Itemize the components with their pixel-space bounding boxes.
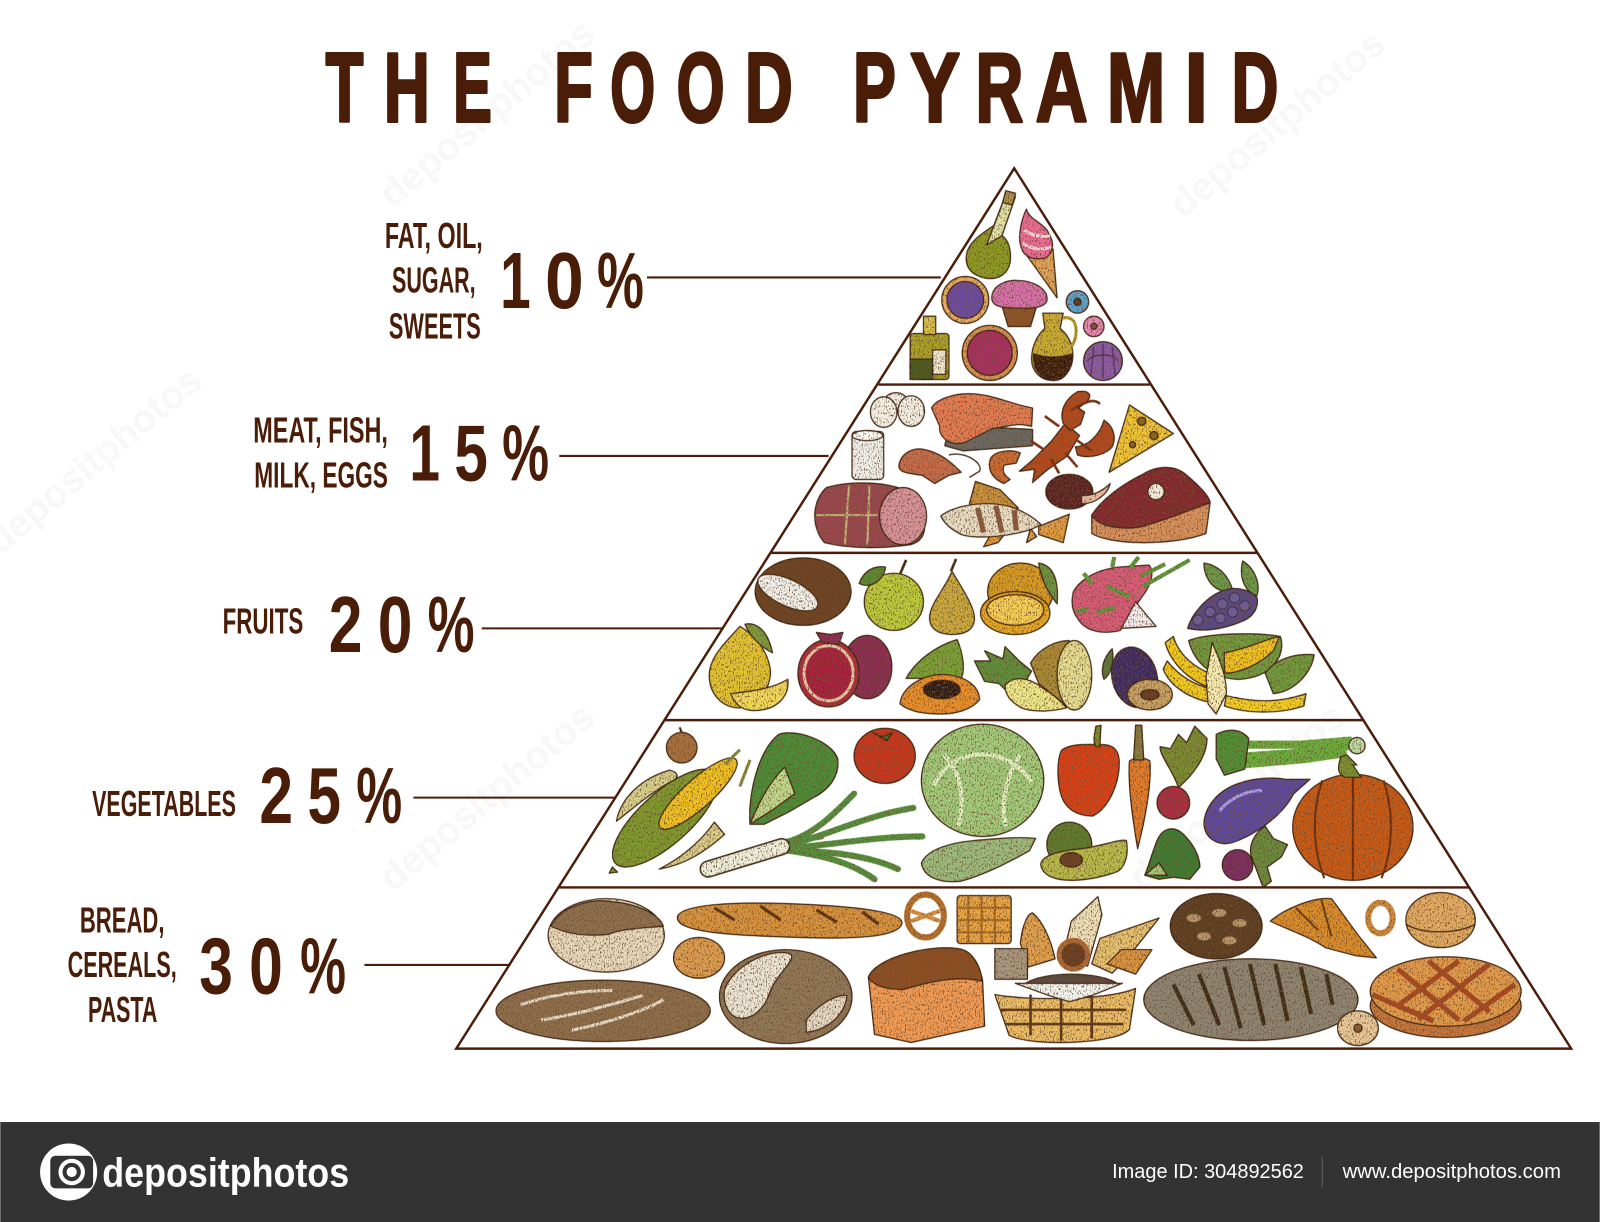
label: bread cereals pasta (68, 900, 177, 1030)
title: R (975, 32, 1023, 142)
label: meat fish milk eggs: MEAT, FISH, (253, 411, 388, 451)
icon: burger bun (1406, 893, 1475, 948)
label: fat oil sugar sweets: SWEETS (389, 307, 481, 347)
icon: papaya (900, 640, 980, 714)
icon: pear (930, 559, 974, 634)
brand name: depositphotos (102, 1149, 349, 1195)
label: meat fish milk eggs (253, 411, 388, 496)
icon: small prawn (989, 451, 1020, 483)
icon: eggs (870, 393, 924, 427)
image id: Image ID: 304892562 (1112, 1161, 1304, 1183)
leader line: 15 (559, 455, 829, 457)
icon: round bread (548, 899, 664, 972)
icon: bread basket (995, 897, 1159, 1043)
icon: tomato (854, 728, 915, 783)
title: Y (910, 32, 960, 142)
icon: lattice pie (1370, 957, 1521, 1037)
icon: onion (666, 727, 697, 763)
icon: dragon fruit (1072, 557, 1190, 632)
icon: eggplant (1204, 778, 1310, 844)
icon: seeded pastry pile (1170, 894, 1262, 959)
title: D (745, 32, 793, 142)
tier: fat oil sugar sweets (385, 216, 941, 347)
icon: leek (708, 794, 922, 879)
title (326, 32, 1278, 142)
icon: berry tart (962, 325, 1017, 380)
icon: pretzel (907, 895, 944, 937)
percentage: 25 (259, 751, 402, 840)
title: E (453, 32, 492, 142)
icon: salmon steak (932, 394, 1033, 451)
icon: beetroot (1222, 826, 1288, 887)
foods: vegetables (598, 724, 1413, 887)
percentage: 20: % (428, 580, 475, 669)
label: meat fish milk eggs: MILK, EGGS (254, 456, 388, 496)
percentage: 30: 3 (199, 922, 233, 1011)
icon: bell pepper (1058, 725, 1119, 816)
tier: vegetables (92, 751, 615, 840)
icon: long rye bread (496, 980, 710, 1041)
icon: coconut (753, 558, 851, 625)
icon: croissant (1270, 898, 1376, 958)
icon: muffin (992, 280, 1047, 326)
watermark (0, 11, 1394, 899)
icon: sourdough loaf (719, 950, 852, 1043)
pyramid outline and tier dividers (456, 168, 1571, 1049)
icon: beef steak (1092, 467, 1210, 543)
percentage: 15: % (502, 408, 549, 497)
icon: purple cake (1084, 342, 1122, 380)
icon: shrimp (899, 449, 980, 483)
title: I (1185, 32, 1208, 142)
title: O (610, 32, 655, 142)
percentage: 15: 5 (454, 408, 488, 497)
percentage: 20: 0 (378, 580, 412, 669)
icon: sliced loaf (868, 948, 985, 1042)
footer bar (0, 1122, 1600, 1222)
title: D (1231, 32, 1278, 142)
icon: corn cob (598, 749, 750, 882)
foods: meat, fish, milk, eggs (815, 391, 1210, 548)
icon: glass jug (1032, 313, 1076, 380)
icon: olive oil bottle (966, 191, 1016, 279)
icon: apple (859, 560, 923, 630)
percentage: 10 (500, 236, 644, 325)
icon: ring biscuit (1368, 903, 1393, 933)
icon: pineapple (974, 641, 1092, 711)
tier: bread cereals pasta (68, 900, 509, 1030)
icon: grapes (1188, 561, 1258, 630)
icon: blue donut (1066, 291, 1089, 313)
percentage: 15 (409, 408, 549, 497)
icon: cabbage (921, 724, 1044, 836)
website: www.depositphotos.com (1342, 1161, 1561, 1183)
leader line: 20 (482, 627, 722, 629)
icon: bone meat (1046, 474, 1110, 509)
leader line: 10 (647, 276, 941, 278)
icon: waffle (957, 896, 1011, 944)
icon: blueberry tart (942, 276, 989, 323)
icon: camera logo (40, 1143, 97, 1201)
title: A (1036, 32, 1088, 142)
foods: breads and cereals (496, 893, 1521, 1046)
label: fruits: FRUITS (223, 601, 303, 641)
title: F (554, 32, 593, 142)
icon: grey rye loaf (1144, 959, 1358, 1040)
percentage: 25: % (356, 751, 402, 840)
watermark: depositphotos (371, 11, 603, 216)
foods: sweets and oils (910, 191, 1122, 380)
icon: oil bottle with label (910, 316, 949, 379)
leader line: 25 (413, 797, 615, 799)
icon: perch fish (941, 481, 1069, 547)
icon: pomegranate (798, 632, 892, 707)
title: M (1107, 32, 1165, 142)
icon: radish (1157, 726, 1207, 819)
percentage: 25: 5 (307, 751, 341, 840)
icon: pumpkin (1293, 755, 1413, 880)
tier: meat fish milk eggs (253, 408, 829, 497)
icon: ice cream cone (1020, 209, 1057, 298)
title: O (677, 32, 725, 142)
label: bread cereals pasta: PASTA (88, 990, 157, 1030)
icon: pink donut (1084, 316, 1104, 337)
icon: baguette (677, 903, 902, 938)
icon: avocado (1041, 822, 1127, 880)
icon: celery (1216, 730, 1365, 775)
tier: fruits (223, 580, 722, 669)
percentage: 10: % (597, 236, 644, 325)
percentage: 10: 0 (545, 236, 584, 325)
icon: bananas (1163, 634, 1314, 714)
icon: zucchini (921, 838, 1036, 882)
label: vegetables: VEGETABLES (92, 784, 236, 824)
icon: roast ham (815, 483, 926, 548)
title: T (326, 32, 363, 142)
percentage: 20: 2 (329, 580, 362, 669)
percentage: 25: 2 (259, 751, 293, 840)
foods: all tiers with engraved grain (496, 191, 1521, 1046)
watermark: depositphotos (1162, 22, 1394, 226)
icon: cheese wedge (1109, 405, 1173, 472)
foods: fruits (709, 557, 1314, 714)
label: fat oil sugar sweets: FAT, OIL, (385, 216, 483, 256)
icon: small bun (674, 937, 725, 978)
title: H (384, 32, 430, 142)
percentage: 30: % (300, 922, 346, 1011)
percentage: 10: 1 (500, 236, 531, 325)
icon: small cookie (1338, 1011, 1378, 1046)
percentage: 15: 1 (409, 408, 440, 497)
icon: quince (709, 624, 788, 711)
leader line: 30 (364, 964, 509, 966)
label: bread cereals pasta: BREAD, (80, 900, 165, 940)
icon: orange (981, 563, 1057, 634)
icon: lettuce (750, 733, 838, 824)
label: fat oil sugar sweets: SUGAR, (392, 261, 476, 301)
percentage: 20 (329, 580, 475, 669)
percentage: 30 (199, 922, 346, 1011)
icon: broccoli (1145, 829, 1200, 879)
icon: carrot (1129, 725, 1150, 849)
percentage: 30: 0 (249, 922, 283, 1011)
icon: plum (1102, 642, 1172, 713)
icon: glass of milk (852, 430, 884, 479)
label: bread cereals pasta: CEREALS, (68, 945, 177, 985)
label: fat oil sugar sweets (385, 216, 483, 347)
icon: lobster (1019, 391, 1114, 482)
watermark: depositphotos (371, 695, 603, 899)
title: P (853, 32, 896, 142)
watermark: depositphotos (1121, 695, 1353, 899)
